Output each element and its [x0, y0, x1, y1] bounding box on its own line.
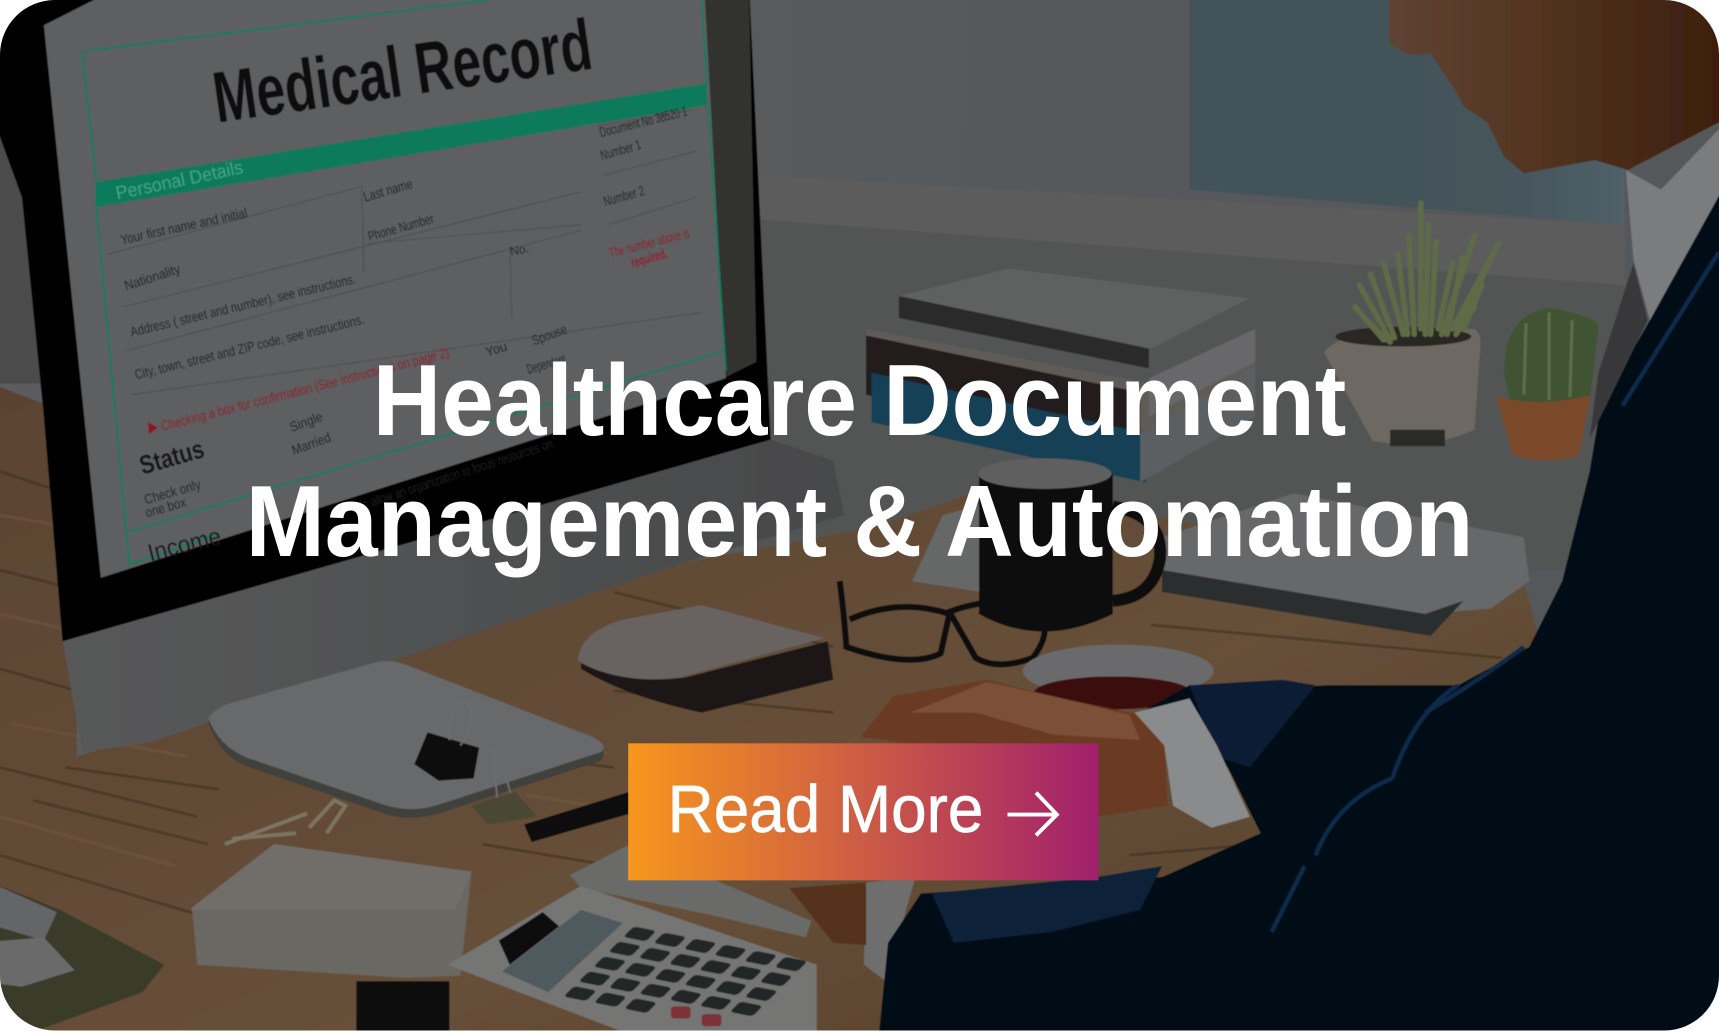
photo: pen [524, 792, 630, 842]
photo: keyboard edge [570, 844, 811, 937]
form red notes [148, 225, 691, 434]
photo: stacked folders bottom left [0, 877, 164, 1032]
photo: cactus [1496, 308, 1599, 460]
photo: potted plant [1324, 203, 1499, 446]
title: Management & Automation [246, 466, 1473, 578]
photo: monitor bezel [0, 0, 771, 641]
form red notes: Checking a box for confirmation (See instructions on page 2) [159, 345, 451, 434]
button: read more: Read More [668, 772, 983, 847]
form field labels [119, 104, 689, 520]
form field labels: Document No 38520 1 [598, 104, 689, 140]
form status label: Status [136, 434, 207, 480]
photo: small black box [356, 981, 449, 1032]
photo: calculator [447, 886, 817, 1032]
photo: man's suit [877, 148, 1719, 1032]
form field labels: Your first name and initial [119, 205, 249, 247]
photo: shirt cuff [1135, 698, 1250, 828]
form field labels: No. [509, 241, 530, 258]
icon: arrow [1008, 793, 1057, 835]
photo: mouse [1023, 645, 1214, 709]
photo: coffee mug [978, 458, 1160, 631]
form field labels: You [483, 339, 509, 359]
photo: binder clips [414, 732, 537, 824]
form field labels: Phone Number [366, 211, 436, 244]
photo: man's collar [1626, 129, 1719, 321]
photo: wooden desk [0, 378, 1557, 1032]
photo: man's tie [1590, 263, 1648, 439]
form field labels: City, town, street and ZIP code, see instructions. [133, 312, 366, 382]
form field labels: to allow an organization to focus resources on [358, 436, 555, 513]
form field labels: Check only [143, 477, 203, 507]
photo: glasses [840, 581, 1045, 664]
photo: white notepad [208, 661, 604, 818]
photo: block of paper notes [192, 844, 471, 978]
photo: office background [0, 0, 1719, 757]
form field labels: Single [288, 409, 325, 435]
form field labels: Last name [362, 176, 414, 205]
form field labels: Married [290, 430, 333, 458]
title [246, 345, 1473, 578]
photo: lower hand [789, 883, 866, 945]
button: read more [628, 743, 1098, 880]
form field labels: Number 1 [599, 137, 643, 163]
photo: wallet [578, 605, 833, 713]
form red notes: The number above is [608, 225, 691, 261]
form section heading: Personal Details [114, 156, 245, 203]
form field labels: Address ( street and number), see instructions. [129, 271, 357, 340]
form income label: Income [145, 523, 224, 567]
form field labels: Nationality [122, 261, 182, 293]
form field labels: one box [144, 494, 188, 520]
photo: computer stand [62, 440, 844, 752]
title: Healthcare Document [373, 345, 1346, 457]
photo: hand on mouse [861, 680, 1168, 817]
form field labels: Number 2 [602, 183, 646, 209]
form field labels: Dependent [525, 351, 567, 377]
photo: paper clips [225, 800, 345, 844]
photo: man's head [1389, 0, 1719, 173]
photo: monitor side edge [702, 0, 756, 378]
medical record form on screen [44, 0, 726, 578]
photo: stack of books [866, 269, 1255, 482]
form red notes: required. [629, 246, 669, 270]
photo: man's shirt under arm [864, 877, 915, 981]
form field labels: Spouse [530, 322, 569, 348]
photo: papers on desk [912, 493, 1529, 636]
